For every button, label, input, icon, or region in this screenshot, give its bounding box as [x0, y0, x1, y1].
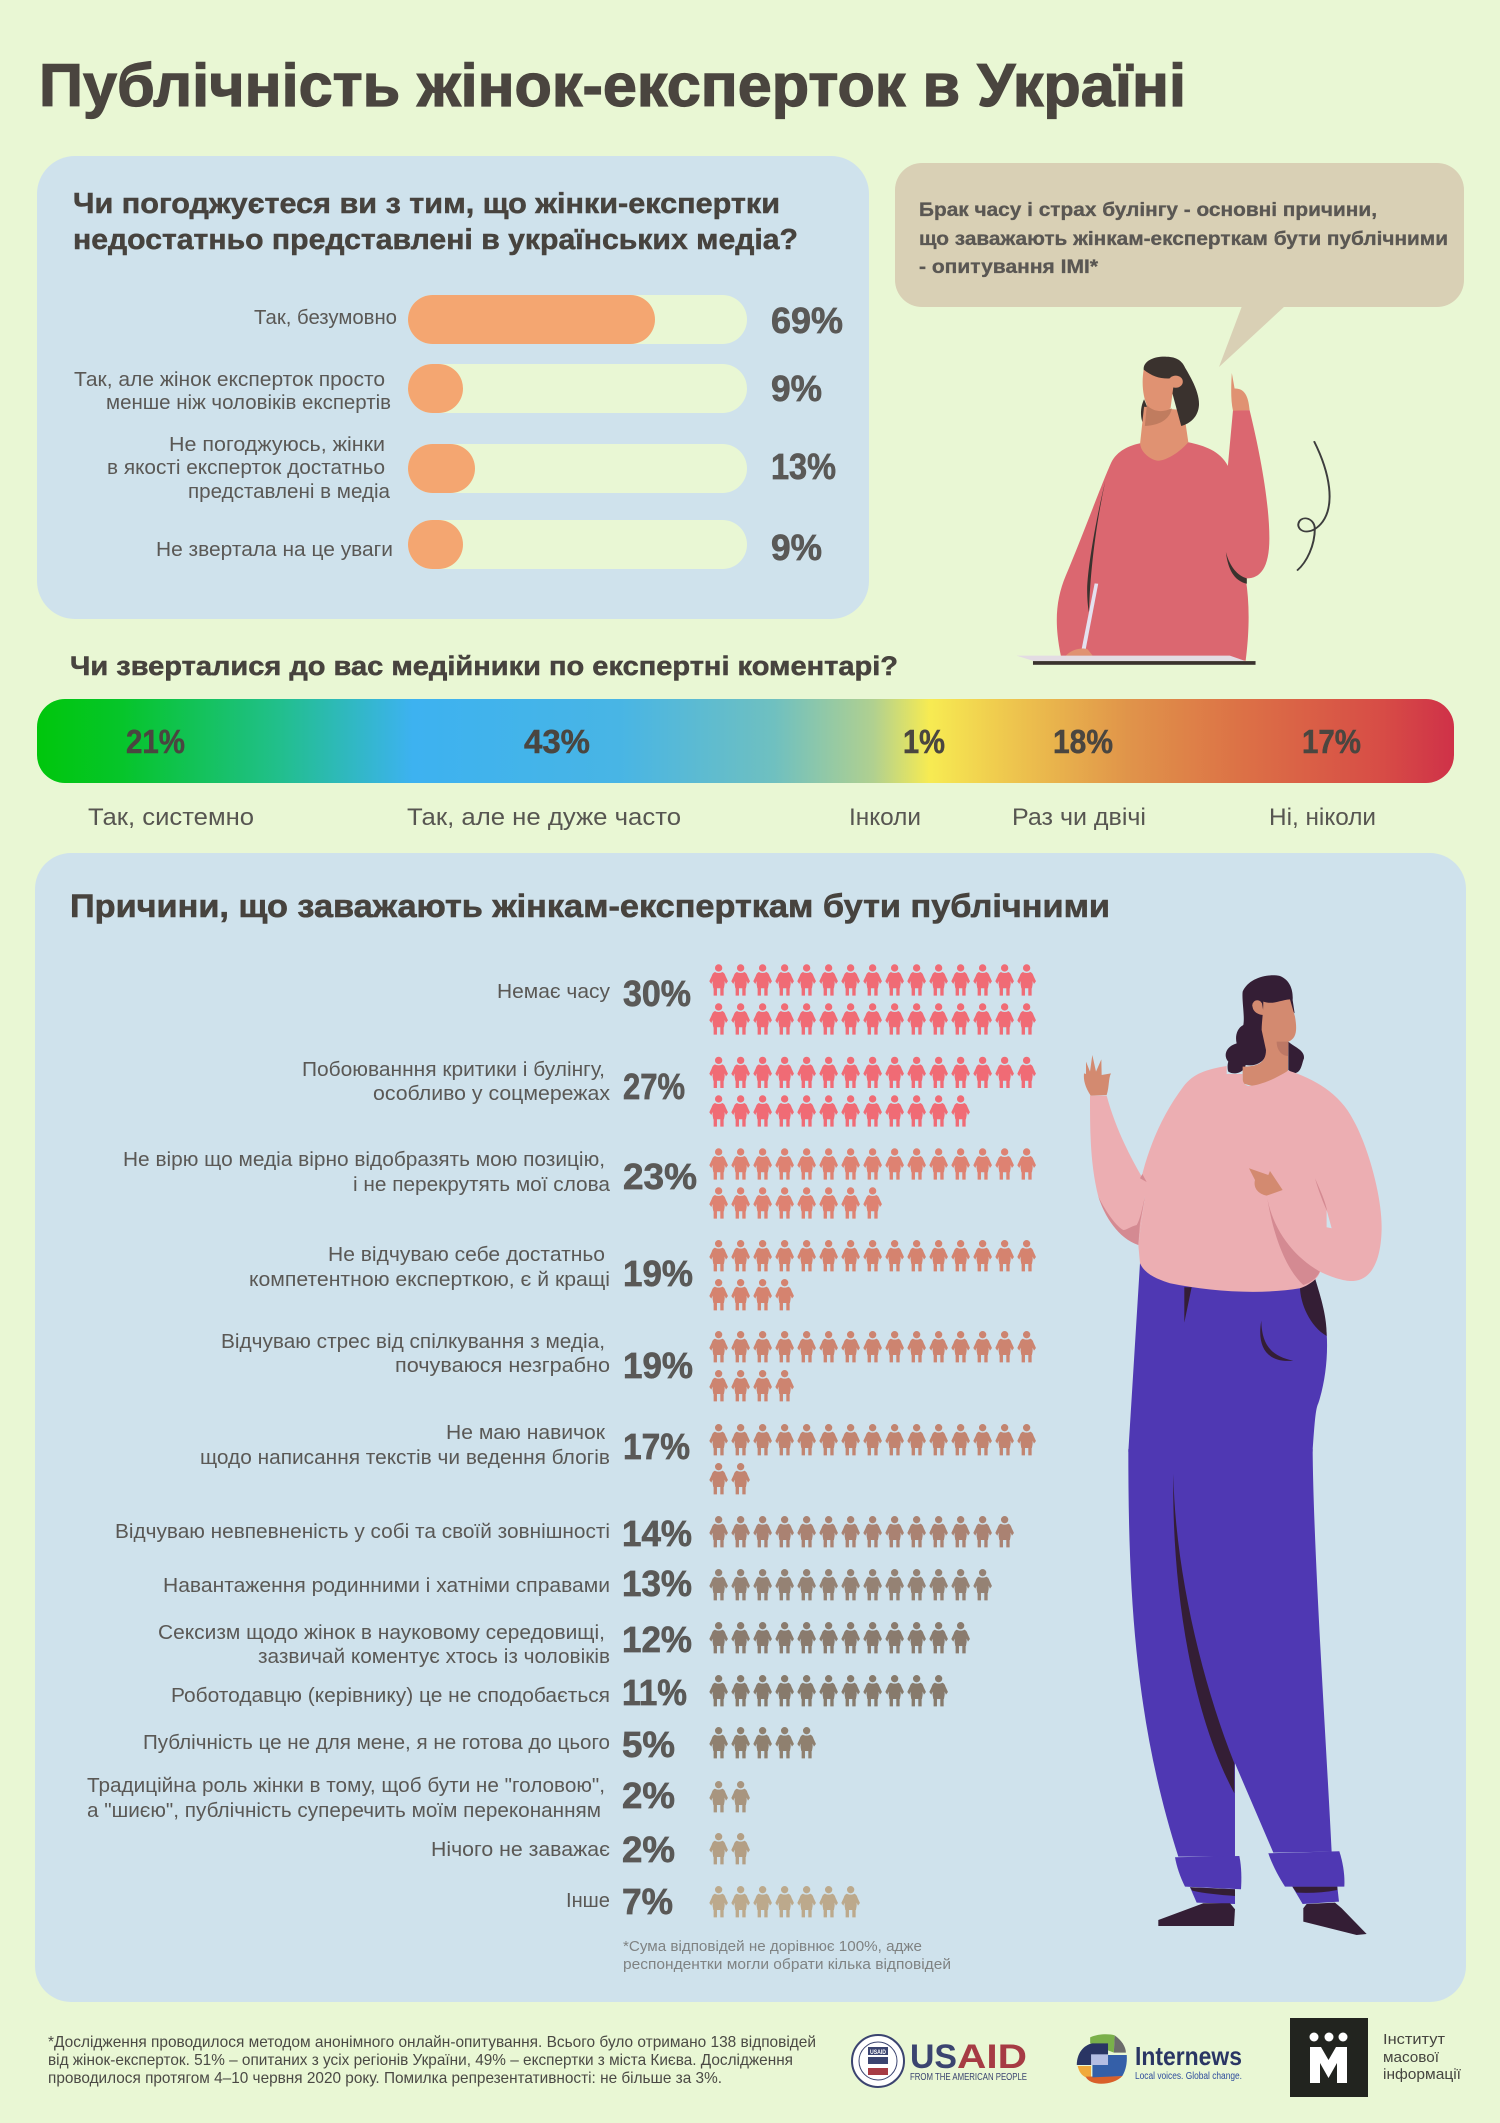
gradient bar: media requests [37, 699, 1454, 783]
logo: Internews [1077, 2034, 1242, 2084]
bar row: 69% [254, 295, 843, 344]
logo: USAID: AID [957, 2038, 1027, 2076]
row: 12% [158, 1619, 970, 1668]
row: 23% [123, 1148, 1036, 1219]
illustration: woman at the desk [1016, 357, 1330, 665]
row: 30%: Немає часу [497, 981, 610, 1003]
row: 30% [497, 964, 1036, 1035]
bar labels: Раз чи двічі [1012, 804, 1146, 831]
row: 11% [171, 1672, 948, 1713]
logo: USAID: USAID [870, 2050, 887, 2056]
logo: Internews: Local voices. Global change. [1135, 2071, 1242, 2082]
heading: media requests: Чи зверталися до вас медійники по експертні коментарі? [70, 651, 898, 681]
row: 5% [143, 1724, 816, 1765]
bar row: 69%: 69% [771, 300, 843, 341]
row: 13% [163, 1563, 992, 1604]
note: sum of answers: респондентки могли обрати кілька відповідей [623, 1956, 951, 1973]
row: 2% nothing [431, 1829, 750, 1870]
row: 19% stress: Відчуваю стрес від спілкування з медіа, [221, 1331, 605, 1353]
gradient bar: media requests: 17% [1302, 723, 1361, 760]
logo: USAID: FROM THE AMERICAN PEOPLE [910, 2072, 1027, 2083]
gradient bar: media requests: 1% [903, 723, 945, 760]
bar labels: Ні, ніколи [1269, 804, 1376, 831]
row: 19% competence: 19% [623, 1253, 693, 1294]
row: 19% competence [249, 1240, 1036, 1310]
logo: Institute of Mass Information: інформації [1383, 2066, 1462, 2083]
note: sum of answers [623, 1938, 951, 1973]
row: 12%: 12% [622, 1619, 692, 1660]
row: 19% competence: компетентною експерткою, є й кращі [249, 1269, 610, 1291]
row: 2% tradition: 2% [622, 1775, 675, 1816]
bar row: 13%: Не погоджуюсь, жінки [169, 434, 385, 456]
row: 2% nothing: Нічого не заважає [431, 1839, 610, 1861]
row: 19% stress: 19% [623, 1345, 693, 1386]
bar row: 13%: представлені в медіа [188, 481, 391, 503]
bar row: 13% [107, 434, 836, 503]
bar row: 9% fewer women: Так, але жінок експерток просто [74, 369, 385, 391]
row: 27%: Побоюванння критики і булінгу, [302, 1059, 605, 1081]
logo: Institute of Mass Information [1290, 2018, 1462, 2097]
row: 27% [302, 1057, 1036, 1127]
footnote: methodology: проводилося протягом 4–10 червня 2020 року. Помилка репрезентативності: не більше за 3%. [48, 2070, 722, 2087]
row: 14%: 14% [622, 1513, 692, 1554]
row: 17%: Не маю навичок [446, 1422, 605, 1444]
row: 11%: Роботодавцю (керівнику) це не сподобається [171, 1685, 610, 1707]
row: 13%: Навантаження родинними і хатніми справами [163, 1575, 610, 1597]
row: 5%: 5% [622, 1724, 675, 1765]
row: 19% stress [221, 1331, 1036, 1401]
footnote: methodology [48, 2034, 816, 2087]
gradient bar: media requests: 21% [126, 723, 185, 760]
logo: USAID: US [910, 2038, 957, 2076]
panel: reasons [35, 853, 1466, 2002]
row: 5%: Публічність це не для мене, я не готова до цього [143, 1732, 610, 1754]
row: 30%: 30% [623, 973, 691, 1014]
row: 17%: щодо написання текстів чи ведення блогів [200, 1447, 610, 1469]
row: 2% nothing: 2% [622, 1829, 675, 1870]
bar row: 69%: Так, безумовно [254, 307, 397, 329]
bar labels: Так, але не дуже часто [407, 804, 681, 831]
row: 14% [115, 1513, 1014, 1554]
heading: agreement question: Чи погоджуєтеся ви з тим, що жінки-експертки [73, 188, 780, 220]
row: 17%: 17% [623, 1426, 690, 1467]
gradient bar: media requests: 43% [524, 723, 590, 760]
callout: speech bubble [895, 163, 1464, 367]
heading: reasons: Причини, що заважають жінкам-експерткам бути публічними [70, 888, 1110, 924]
row: 7%: Інше [566, 1890, 610, 1912]
illustration: standing woman [1084, 975, 1382, 1935]
row: 23%: і не перекрутять мої слова [353, 1174, 611, 1196]
decorative swirl [1297, 441, 1330, 571]
logo: Institute of Mass Information: масової [1383, 2049, 1440, 2066]
row: 23%: 23% [623, 1156, 697, 1197]
bar row: 9% fewer women: менше ніж чоловіків експертів [106, 392, 391, 414]
row: 7% [566, 1881, 860, 1922]
row: 2% tradition: Традиційна роль жінки в тому, щоб бути не "головою", [87, 1775, 605, 1797]
row: 19% competence: Не відчуваю себе достатньо [328, 1244, 605, 1266]
row: 13%: 13% [622, 1563, 692, 1604]
row: 2% tradition [87, 1775, 750, 1822]
bar labels [88, 804, 1376, 831]
bar row: 9% fewer women: 9% [771, 368, 822, 409]
footnote: methodology: *Дослідження проводилося методом анонімного онлайн-опитування. Всього було отримано 138 відповідей [48, 2034, 816, 2051]
bar row: 9% fewer women [74, 364, 822, 414]
row: 12%: зазвичай коментує хтось із чоловіків [258, 1646, 610, 1668]
callout: speech bubble: - опитування ІМІ* [919, 257, 1099, 278]
title: Публічність жінок-експерток в Україні [39, 52, 1186, 119]
note: sum of answers: *Сума відповідей не дорівнює 100%, адже [623, 1938, 922, 1955]
row: 17% [200, 1422, 1036, 1494]
row: 11%: 11% [622, 1672, 687, 1713]
bar row: 13%: 13% [771, 446, 836, 487]
bar row: 9% no attention: 9% [771, 527, 822, 568]
logo: Institute of Mass Information: Інститут [1383, 2031, 1445, 2048]
row: 23%: Не вірю що медіа вірно відобразять мою позицію, [123, 1149, 605, 1171]
bar labels: Так, системно [88, 804, 254, 831]
row: 2% tradition: а "шиєю", публічність суперечить моїм переконанням [87, 1800, 601, 1822]
bar row: 9% no attention: Не звертала на це уваги [156, 539, 393, 561]
bar row: 13%: в якості експерток достатньо [107, 457, 385, 479]
callout: speech bubble: що заважають жінкам-експерткам бути публічними [919, 229, 1448, 250]
panel: agreement question [37, 156, 869, 619]
gradient bar: media requests: 18% [1053, 723, 1113, 760]
logo: USAID [852, 2035, 1027, 2087]
bar row: 9% no attention [156, 520, 822, 569]
row: 7%: 7% [622, 1881, 673, 1922]
bar labels: Інколи [849, 804, 921, 831]
row: 19% stress: почуваюся незграбно [395, 1355, 610, 1377]
callout: speech bubble: Брак часу і страх булінгу - основні причини, [919, 200, 1377, 221]
footnote: methodology: від жінок-експерток. 51% – опитаних з усіх регіонів України, 49% – експертки з міста Києва. Дослідження [48, 2052, 793, 2069]
logo: Internews: Internews [1135, 2041, 1242, 2071]
heading: agreement question: недостатньо представлені в українських медіа? [73, 224, 798, 256]
row: 27%: особливо у соцмережах [373, 1083, 610, 1105]
row: 12%: Сексизм щодо жінок в науковому середовищі, [158, 1622, 605, 1644]
row: 27%: 27% [623, 1066, 685, 1107]
heading: agreement question [73, 188, 798, 256]
row: 14%: Відчуваю невпевненість у собі та своїй зовнішності [115, 1521, 610, 1543]
